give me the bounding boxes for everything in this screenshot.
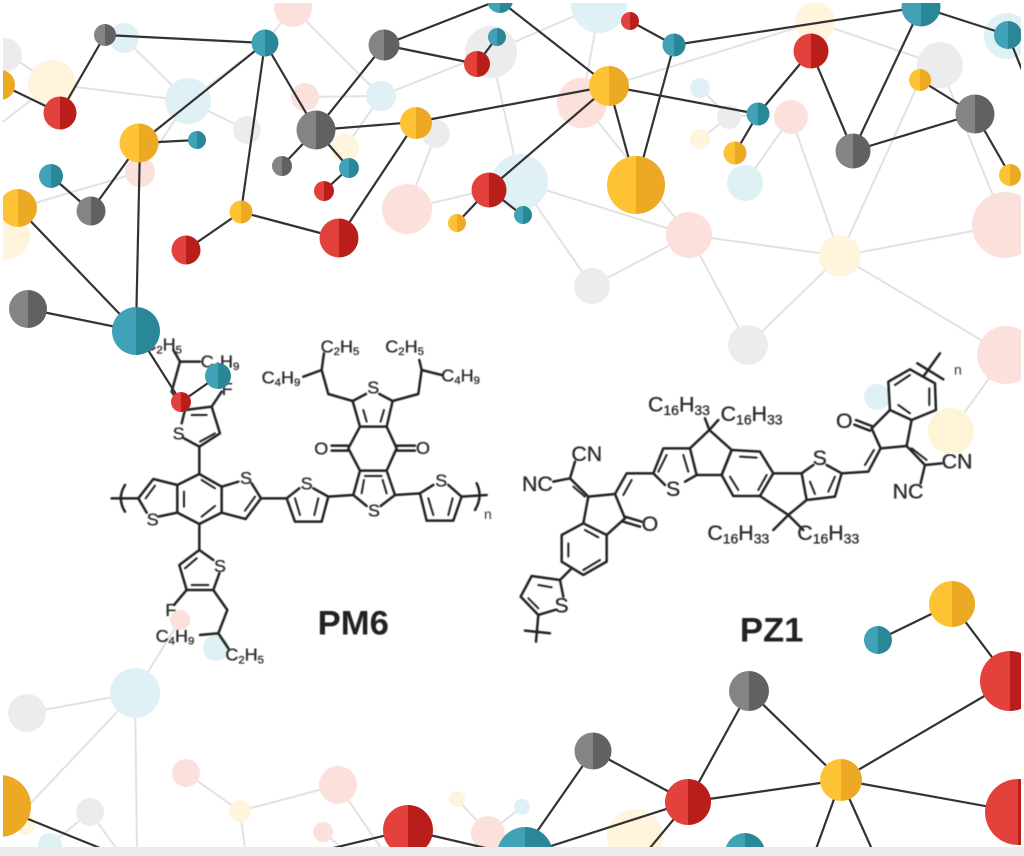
PZ1 atom labels: 33 bbox=[844, 530, 859, 546]
PM6 atom labels: C bbox=[143, 335, 156, 355]
PZ1 atom labels: CN bbox=[571, 442, 602, 466]
PM6 atom labels: 4 bbox=[454, 375, 461, 387]
PM6 atom labels: 9 bbox=[233, 361, 239, 373]
PM6 atom labels: 5 bbox=[353, 346, 359, 358]
PZ1 atom labels: 33 bbox=[754, 530, 769, 546]
PZ1 atom labels: 33 bbox=[767, 411, 783, 427]
PM6 atom labels: H bbox=[220, 351, 233, 371]
PM6 atom labels: 5 bbox=[176, 344, 182, 356]
PM6 atom labels: C bbox=[156, 626, 169, 646]
PM6 atom labels: H bbox=[405, 336, 418, 356]
chemical structures bbox=[112, 335, 972, 666]
PM6 atom labels: C bbox=[225, 645, 238, 665]
PM6 atom labels: H bbox=[461, 365, 474, 385]
PM6 atom labels: 9 bbox=[188, 636, 194, 648]
PZ1 atom labels: H bbox=[679, 393, 694, 417]
PM6 atom labels: n bbox=[484, 506, 492, 522]
PM6 atom labels: 9 bbox=[294, 377, 300, 389]
PM6 atom labels: 4 bbox=[169, 636, 175, 648]
PM6 atom labels: 4 bbox=[214, 361, 220, 373]
PZ1 atom labels: O bbox=[642, 512, 658, 536]
PZ1 atom labels: 16 bbox=[813, 530, 828, 546]
PZ1 atom labels: C bbox=[721, 402, 736, 426]
structure: PZ1 polymer bbox=[521, 353, 972, 650]
PM6 atom labels: 4 bbox=[275, 377, 281, 389]
PM6 atom labels: 2 bbox=[238, 654, 245, 666]
PM6 atom labels: C bbox=[385, 336, 398, 356]
PM6 atom labels: C bbox=[201, 351, 214, 371]
PM6 atom labels bbox=[143, 335, 492, 666]
PM6 atom labels: S bbox=[240, 468, 252, 488]
PM6 atom labels: O bbox=[314, 438, 328, 458]
PM6 atom labels: O bbox=[416, 438, 430, 458]
PZ1 atom labels: H bbox=[738, 521, 754, 545]
PM6 atom labels: C bbox=[321, 336, 334, 356]
PM6 atom labels: S bbox=[301, 473, 313, 493]
PZ1 atom labels: O bbox=[836, 409, 853, 433]
PZ1 atom labels: C bbox=[648, 393, 663, 417]
PZ1 atom labels: C bbox=[707, 521, 723, 545]
PM6 atom labels: S bbox=[214, 556, 226, 576]
PM6 atom labels: 5 bbox=[418, 346, 424, 358]
PM6 atom labels: C bbox=[262, 367, 275, 387]
PM6 atom labels: S bbox=[367, 377, 379, 397]
PM6 atom labels: S bbox=[435, 471, 447, 491]
PZ1 atom labels: 16 bbox=[736, 411, 752, 427]
PZ1 atom labels: H bbox=[752, 402, 767, 426]
PZ1 atom labels: 16 bbox=[663, 402, 679, 418]
PM6 atom labels: 2 bbox=[398, 346, 405, 358]
PZ1 name label: PZ1 bbox=[740, 612, 803, 650]
PM6 atom labels: 2 bbox=[156, 344, 163, 356]
PZ1 atom labels: S bbox=[813, 446, 827, 470]
PZ1 atom labels: S bbox=[666, 477, 680, 501]
PM6 atom labels: S bbox=[173, 423, 185, 443]
PM6 atom labels: 9 bbox=[474, 375, 480, 387]
bottom grey strip bbox=[0, 847, 1024, 856]
PM6 atom labels: 5 bbox=[258, 654, 264, 666]
PZ1 atom labels: NC bbox=[522, 472, 553, 496]
PM6 atom labels: F bbox=[222, 379, 233, 399]
PM6 atom labels: H bbox=[281, 367, 294, 387]
PM6 atom labels: H bbox=[175, 626, 188, 646]
PM6 name label: PM6 bbox=[318, 604, 389, 642]
PZ1 atom labels: n bbox=[954, 362, 962, 378]
PZ1 atom labels: CN bbox=[942, 449, 972, 473]
PZ1 atom labels: 16 bbox=[723, 530, 738, 546]
PM6 atom labels: H bbox=[163, 335, 176, 355]
structure: PM6 polymer bbox=[112, 335, 492, 666]
PZ1 atom labels: H bbox=[828, 521, 844, 545]
PZ1 atom labels: C bbox=[797, 521, 813, 545]
PM6 atom labels: S bbox=[368, 501, 380, 521]
PZ1 atom labels: NC bbox=[893, 480, 923, 504]
PM6 atom labels: 2 bbox=[334, 346, 340, 358]
PZ1 atom labels bbox=[522, 362, 972, 618]
PZ1 atom labels: S bbox=[554, 594, 569, 618]
PM6 atom labels: F bbox=[165, 600, 176, 620]
PM6 atom labels: C bbox=[441, 365, 454, 385]
PM6 atom labels: S bbox=[147, 509, 159, 529]
PM6 atom labels: H bbox=[245, 645, 258, 665]
PZ1 atom labels: 33 bbox=[694, 402, 710, 418]
pale cream node overlapping PZ1 bbox=[928, 408, 974, 454]
PM6 atom labels: H bbox=[340, 336, 353, 356]
